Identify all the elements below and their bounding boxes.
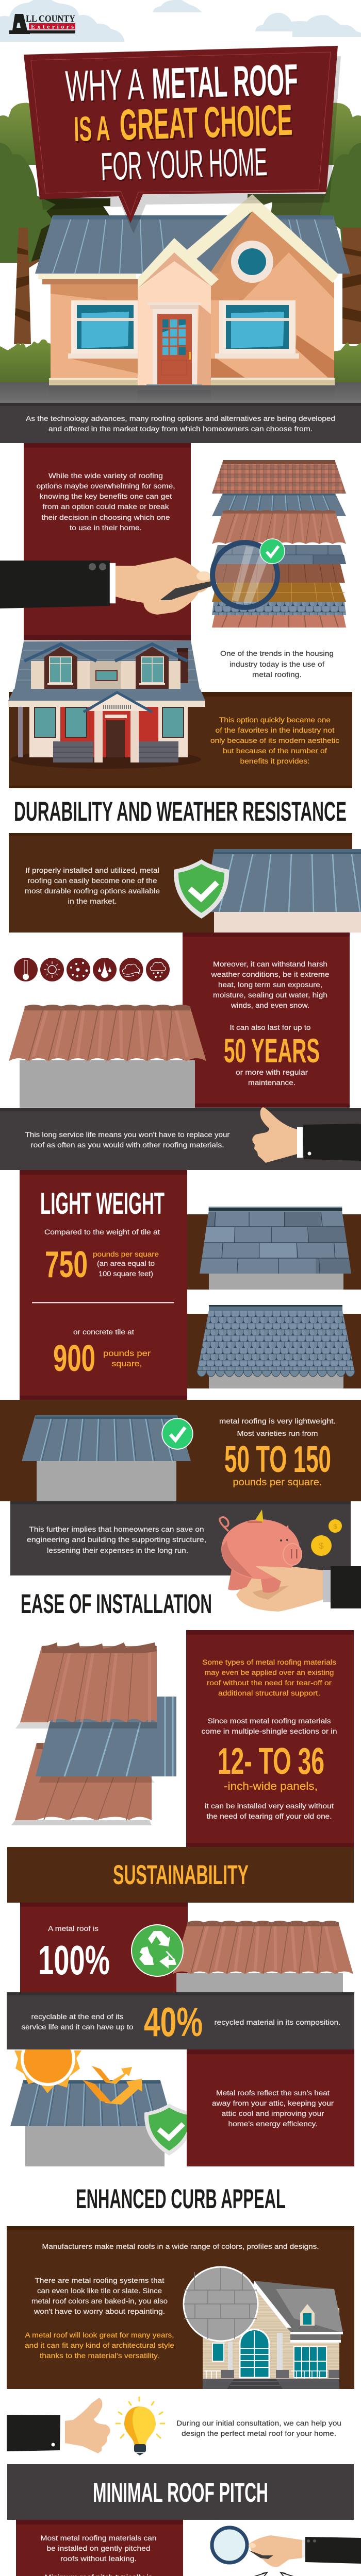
icon: wind cloud (120, 958, 143, 981)
panel: weather (183, 933, 350, 1108)
panel: curb appeal: Manufacturers make metal roofs in a wide range of colors, profiles and designs. (42, 2243, 319, 2250)
trees behind house (0, 103, 361, 266)
panel: installation: the need of tearing off your old one. (206, 1812, 332, 1820)
panel: curb appeal: A metal roof will look great for many years, (25, 2331, 174, 2339)
panel: weather: Moreover, it can withstand harsh (213, 960, 327, 968)
icon: snow cloud (146, 958, 170, 981)
panel: reflect heat: attic cool and improving your (222, 2110, 324, 2117)
clouds (0, 0, 361, 42)
panel: installation: Some types of metal roofing materials (202, 1658, 336, 1666)
panel: savings: This further implies that homeowners can save on (29, 1526, 204, 1533)
panel: light weight: Compared to the weight of tile at (44, 1228, 160, 1236)
text: one of the trends (220, 650, 334, 679)
icon: water drops (93, 958, 117, 981)
first floor (18, 692, 188, 762)
panel: variety of options: options maybe overwhelming for some, (36, 482, 175, 490)
panel: reflect heat (187, 2049, 354, 2166)
panel: curb appeal: metal roof colors are baked-in, you also (31, 2297, 168, 2305)
porch gable (138, 238, 219, 390)
piggy bank in hand (220, 1510, 361, 1612)
panel: durable: most durable roofing options available (25, 887, 160, 895)
panel: light weight: LIGHT WEIGHT (40, 1187, 165, 1221)
roof material stack (212, 460, 346, 628)
panel: 100 percent: A metal roof is (48, 1925, 99, 1933)
dormers (24, 644, 188, 689)
icon: thumbs up and lightbulb (7, 2397, 165, 2455)
panel: durable (9, 833, 352, 933)
house walls (38, 194, 339, 378)
oval window (231, 241, 273, 283)
panel: installation: Since most metal roofing materials (207, 1717, 331, 1725)
arrows (201, 2572, 347, 2576)
house: metal roof cottage (35, 194, 350, 390)
logo top (9, 13, 75, 34)
text: one of the trends: One of the trends in the housing (220, 650, 334, 657)
intro band (0, 403, 361, 443)
panel: option became favorite: but because of the number of (223, 747, 327, 755)
panel: variety of options: While the wide variety of roofing (48, 472, 163, 480)
panel: light weight: 900 (53, 1338, 95, 1379)
panel: installation: may even be applied over an existing (204, 1669, 334, 1676)
band: minimal roof pitch (7, 2464, 354, 2520)
band: metal weight: pounds per square. (233, 1477, 322, 1488)
panel: light weight: or concrete tile at (73, 1328, 134, 1336)
band: 40 percent (7, 1992, 354, 2049)
band: sustainability (7, 1847, 354, 1903)
text: consultation: design the perfect metal roof for your home. (182, 2430, 336, 2437)
panel: weather: heat, long term sun exposure, (218, 981, 322, 989)
band: metal weight: metal roofing is very lightweight. (219, 1417, 336, 1425)
bushes (0, 340, 361, 382)
house base trim (49, 378, 335, 385)
band: 40 percent: recyclable at the end of its (31, 2013, 124, 2021)
hand with magnifier (212, 2528, 361, 2567)
panel: variety of options: their decision in choosing which one (41, 514, 170, 521)
panel: light weight: square, (111, 1360, 142, 1368)
magnified slate circle (184, 2267, 258, 2341)
panel: installation: come in multiple-shingle sections or in (201, 1727, 337, 1735)
panel: reflect heat: away from your attic, keeping your (212, 2099, 334, 2107)
piggy bank in hand: $ (319, 1541, 324, 1551)
icon: recycle (132, 1925, 183, 1976)
panel: weather: moisture, sealing out water, high (213, 991, 327, 999)
terracotta roof with recycle icon (132, 1921, 353, 1992)
arched window (240, 2330, 269, 2378)
heading: ease of installation: EASE OF INSTALLATION (21, 1589, 212, 1619)
icon: sun (40, 958, 64, 981)
panel: durable: If properly installed and utilized, metal (25, 867, 159, 874)
panel: curb appeal: and it can fit any kind of architectural style (25, 2342, 174, 2349)
panel: installation: roof without the need for tear-off or (207, 1679, 332, 1687)
panel: savings: engineering and building the supporting structure, (27, 1536, 206, 1544)
band: metal weight (0, 1400, 361, 1501)
door (146, 302, 202, 390)
intro band: As the technology advances, many roofing options and alternatives are being developed (26, 415, 335, 422)
metal roof with wall and shield (174, 849, 361, 933)
icon: thermometer (14, 958, 38, 981)
text: consultation: During our initial consultation, we can help you (176, 2419, 341, 2427)
text: one of the trends: industry today is the use of (229, 660, 324, 668)
logo top: Exteriors (31, 23, 74, 30)
terracotta roof with wall (9, 1005, 206, 1108)
panel: variety of options: knowing the key benefits one can get (39, 493, 172, 500)
panel: option became favorite: This option quickly became one (219, 716, 331, 724)
speech bubble title (24, 46, 341, 233)
panel: weather: maintenance. (248, 1079, 296, 1087)
arrows: reflected heat (83, 2066, 142, 2105)
panel: savings (10, 1501, 351, 1575)
roof panels layered (11, 1642, 176, 1825)
icon: thumbs up (252, 1107, 361, 1163)
band: 40 percent: 40% (144, 1999, 203, 2045)
panel: variety of options: to use in their home. (70, 524, 142, 532)
panel: pitch (16, 2520, 183, 2576)
band: service life (0, 1108, 361, 1170)
band: service life: roof as often as you would with other roofing materials. (31, 1141, 224, 1149)
slate roof panel (187, 1207, 361, 1290)
icon: hail (67, 958, 90, 981)
panel: option became favorite (9, 692, 352, 788)
panel: option became favorite: benefits it provides: (240, 757, 309, 765)
panel: light weight: 750 (45, 1244, 88, 1285)
panel: light weight: 100 square feet) (99, 1270, 153, 1278)
panel: option became favorite: only because of its modern aesthetic (210, 737, 339, 744)
windows (68, 300, 299, 359)
intro band: and offered in the market today from which homeowners can choose from. (48, 425, 313, 433)
logo top: LL COUNTY (26, 13, 75, 24)
band: 40 percent: recycled material in its composition. (215, 2019, 340, 2026)
band: 40 percent: service life and it can have up to (22, 2023, 133, 2031)
panel: curb appeal: can even look like tile or slate. Since (37, 2287, 162, 2295)
panel: pitch: Most metal roofing materials can (40, 2534, 157, 2542)
panel: pitch: be installed on gently pitched (46, 2545, 151, 2552)
panel: 100 percent: 100% (38, 1937, 110, 1983)
pitch house shape (199, 2572, 349, 2576)
scallop roof panel (187, 1305, 361, 1388)
panel: curb appeal (7, 2226, 354, 2389)
panel: pitch: roofs without leaking. (60, 2555, 137, 2563)
panel: reflect heat: home's energy efficiency. (228, 2120, 318, 2128)
sun and metal roof (10, 2031, 194, 2166)
panel: installation: additional structural support. (218, 1689, 320, 1697)
trunks (0, 228, 361, 345)
panel: light weight: pounds per (103, 1349, 151, 1358)
panel: curb appeal: There are metal roofing systems that (35, 2277, 165, 2284)
band: sustainability: SUSTAINABILITY (113, 1860, 249, 1890)
panel: durable: in the market. (68, 897, 117, 905)
panel: light weight: pounds per square (93, 1250, 159, 1258)
panel: light weight (20, 1170, 187, 1400)
panel: savings: lessening their expenses in the long run. (47, 1547, 188, 1554)
panel: weather: or more with regular (236, 1069, 308, 1076)
panel: curb appeal: won't have to worry about repainting. (34, 2308, 165, 2315)
panel: weather: winds, and even snow. (231, 1002, 309, 1009)
band: metal weight: Most varieties run from (237, 1430, 318, 1437)
panel: reflect heat: Metal roofs reflect the sun's heat (216, 2089, 330, 2097)
panel: durable: roofing can easily become one of the (28, 877, 157, 885)
panel: installation: -inch-wide panels, (224, 1781, 318, 1792)
panel: weather: It can also last for up to (230, 1024, 310, 1031)
panel: installation (186, 1630, 354, 1847)
suburban house (184, 2267, 343, 2389)
panel: curb appeal: thanks to the material's versatility. (40, 2352, 159, 2360)
panel: variety of options: from an option could make or break (42, 503, 169, 511)
house with dormers (8, 640, 205, 769)
panel: installation: it can be installed very easily without (205, 1802, 334, 1810)
panel: variety of options (24, 443, 191, 640)
text: one of the trends: metal roofing. (252, 671, 302, 679)
icon: bulb (116, 2397, 165, 2455)
title text (64, 55, 301, 190)
hand with magnifying glass (0, 539, 285, 615)
panel: weather: weather conditions, be it extreme (210, 971, 329, 978)
title text: WHY A (64, 60, 144, 111)
band: service life: This long service life means you won't have to replace your (25, 1131, 230, 1139)
weather icons (14, 958, 170, 981)
title text: IS A (73, 109, 110, 149)
piggy bank in hand: $ (333, 1522, 337, 1530)
text: consultation (176, 2419, 341, 2437)
panel: option became favorite: of the favorites in the industry not (216, 726, 335, 734)
road (0, 382, 361, 403)
panel: 100 percent (20, 1903, 188, 1992)
panel: light weight: (an area equal to (97, 1260, 155, 1267)
